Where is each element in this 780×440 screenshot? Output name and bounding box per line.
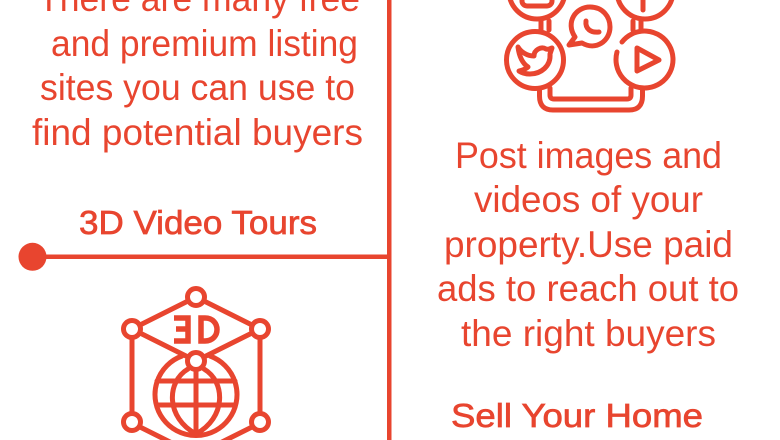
icon: 3D globe network [124,288,268,440]
text block: listing sites: sites you can use to [40,67,355,108]
text block: post images and videos: videos of your [474,179,703,220]
text block: post images and videos: ads to reach out to [437,268,739,309]
text block: listing sites: and premium listing [51,23,358,64]
timeline branch with dot [18,243,388,271]
heading: Sell Your Home: Sell Your Home [451,397,703,434]
play bubble [616,31,673,88]
text block: listing sites: find potential buyers [32,112,363,153]
text block: post images and videos [437,135,739,354]
text block: post images and videos: Post images and [455,135,722,176]
icon: phone with social media bubbles [506,0,673,110]
central vertical timeline [387,0,392,440]
3D label [174,318,217,341]
twitter bubble [506,32,564,88]
text block: listing sites [32,0,363,153]
top left bubble [509,0,565,19]
text block: post images and videos: the right buyers [461,313,716,354]
top right bubble [617,0,673,19]
phone body [540,89,642,110]
text block: post images and videos: property.Use paid [444,224,733,265]
heading: 3D Video Tours: 3D Video Tours [79,204,317,241]
whatsapp bubble [569,7,610,46]
